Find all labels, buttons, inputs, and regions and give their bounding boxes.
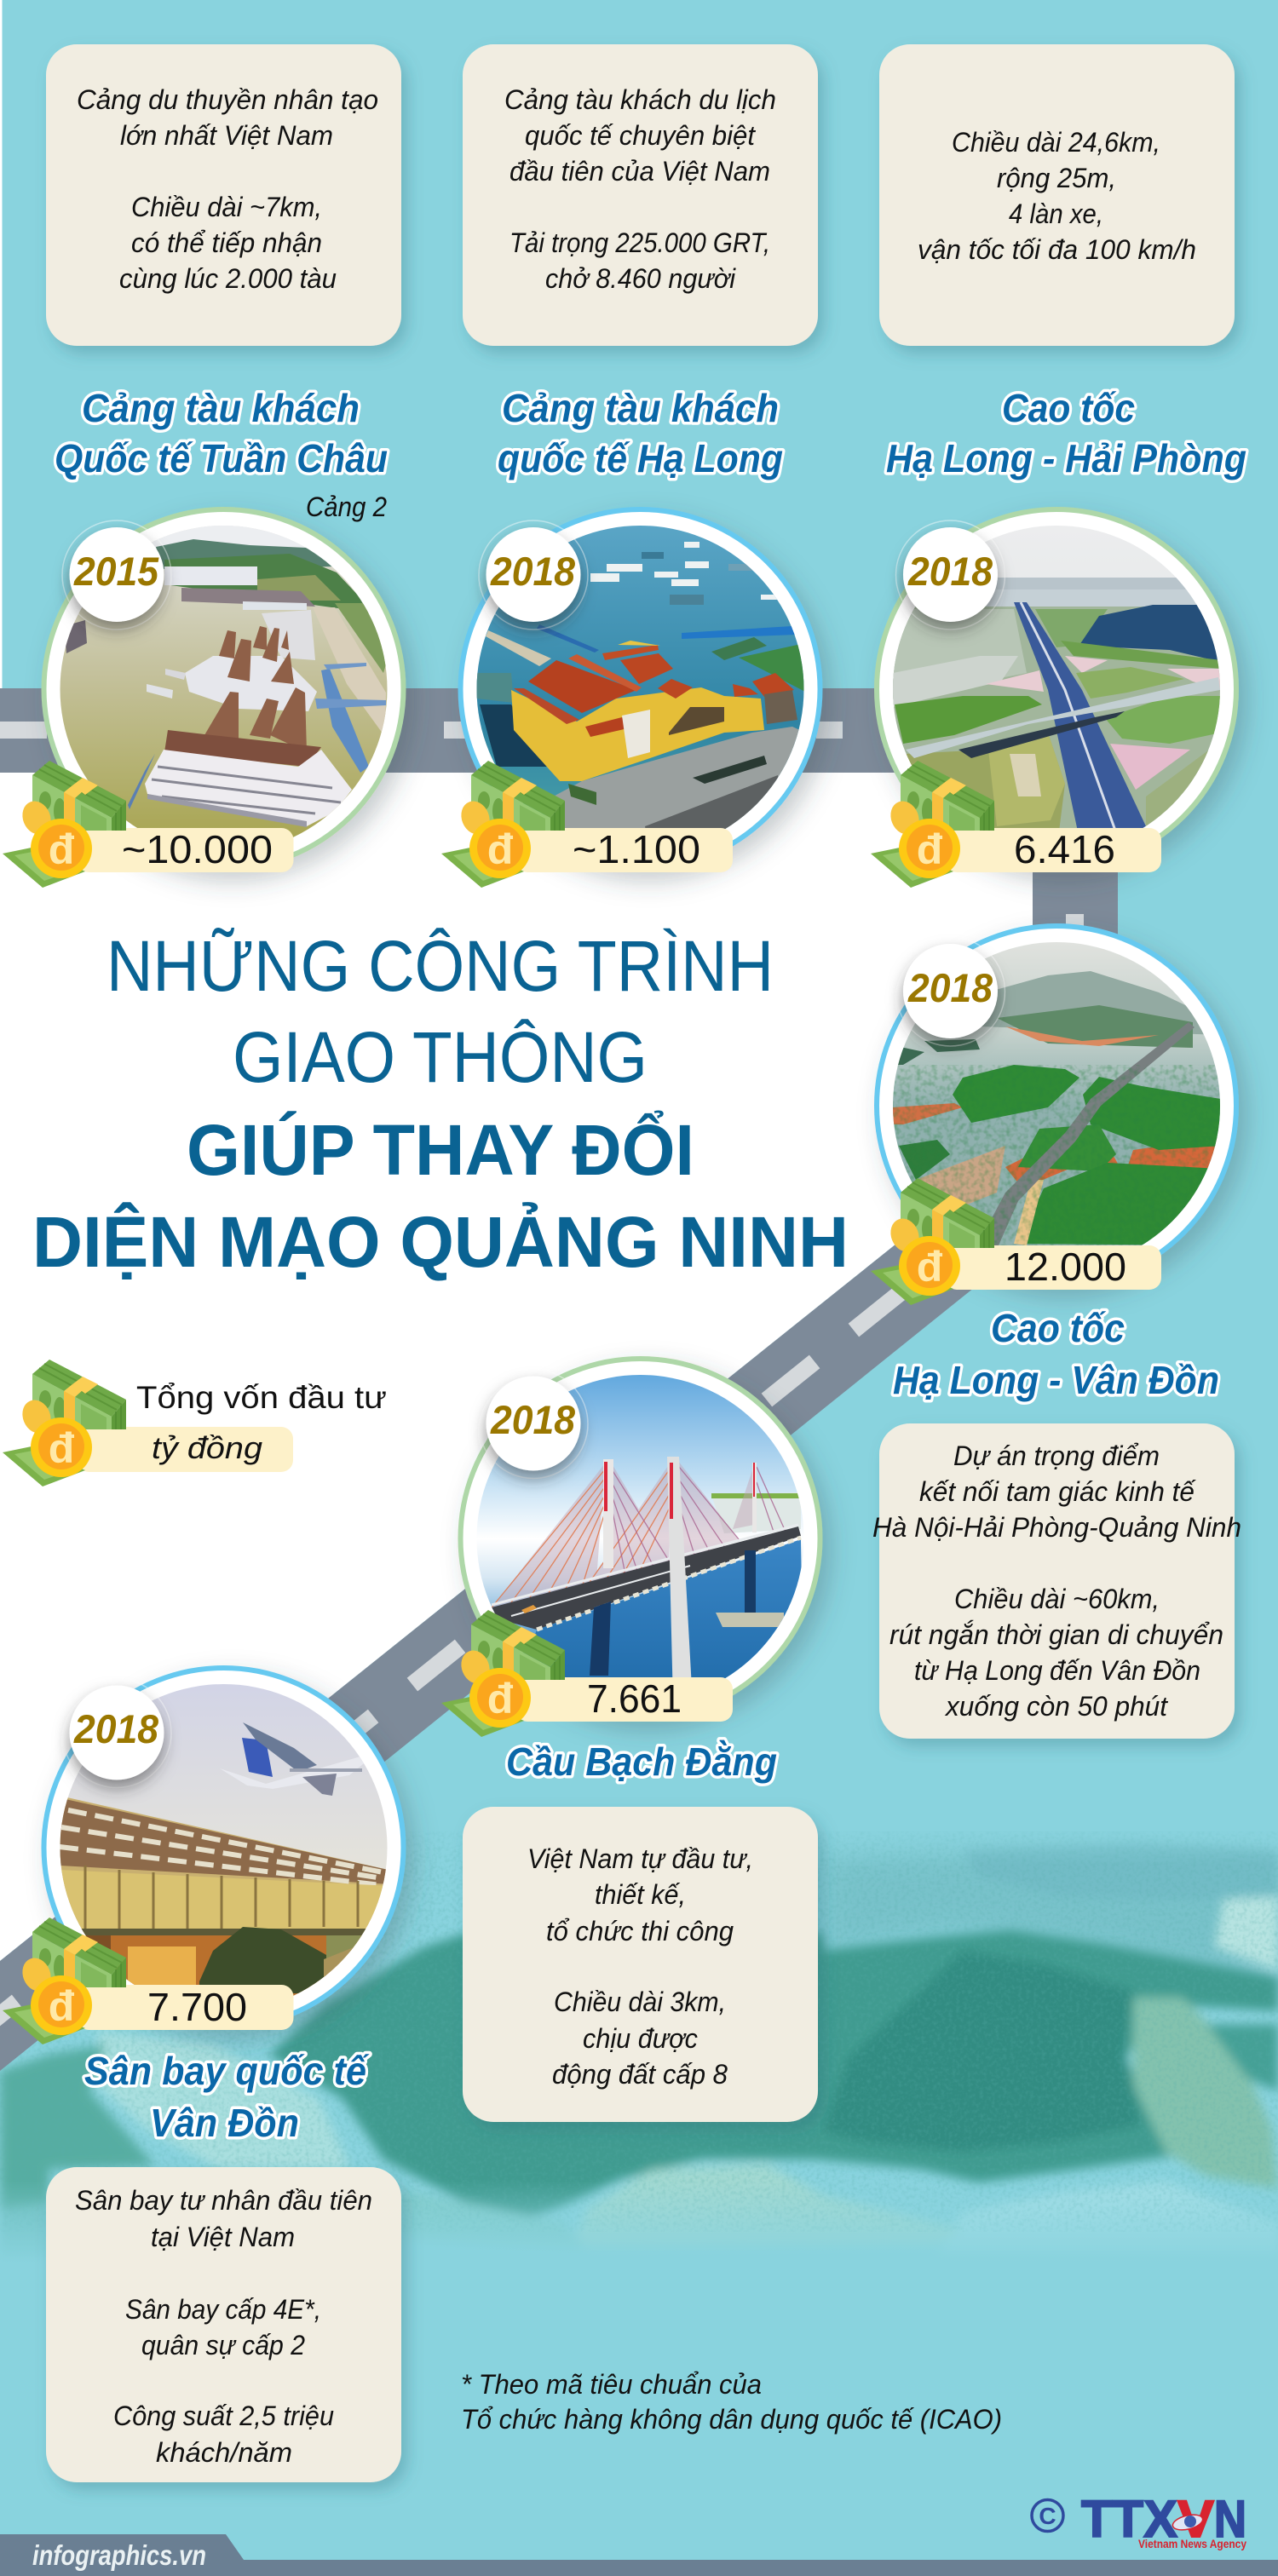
footnote: ICAO standard: [461, 2369, 1002, 2435]
year badge: 2018: [479, 1370, 588, 1479]
panel: Bạch Đằng bridge description: chịu được: [583, 2023, 698, 2054]
year badge: 2018: [479, 520, 588, 630]
title: NHỮNG CÔNG TRÌNH: [106, 926, 774, 1006]
panel: airport description: quân sự cấp 2: [141, 2330, 305, 2360]
investment: ~1.100: ~1.100: [573, 827, 700, 871]
panel: Hạ Long - Hải Phòng description: Chiều dài 24,6km,: [952, 127, 1160, 158]
panel: Tuần Châu description: Chiều dài ~7km,: [131, 192, 322, 222]
panel: airport description: tại Việt Nam: [151, 2222, 295, 2252]
heading: Cảng tàu khách Quốc tế Tuần Châu: Cảng tàu khách: [82, 386, 360, 430]
year badge: 2018: 2018: [907, 965, 993, 1010]
logo: TTXVN Vietnam News Agency: N: [1214, 2490, 1246, 2548]
year badge: 2015: [62, 520, 171, 630]
investment: ~10.000: ~10.000: [122, 827, 273, 871]
heading: Sân bay quốc tế Vân Đồn: [84, 2049, 370, 2145]
panel: Tuần Châu description: Cảng du thuyền nhân tạo: [77, 84, 378, 115]
panel: Vân Đồn expressway description: xuống còn 50 phút: [944, 1691, 1168, 1722]
investment: 7.700: [3, 1918, 293, 2044]
legend: total investment: tỷ đồng: [152, 1430, 262, 1465]
investment: 7.661: [441, 1610, 733, 1737]
panel: Vân Đồn expressway description: kết nối tam giác kinh tế: [919, 1476, 1196, 1507]
investment: 7.700: đ: [49, 1982, 75, 2030]
investment: 7.661: đ: [487, 1675, 514, 1722]
panel: Hạ Long - Hải Phòng description: [879, 44, 1235, 346]
panel: airport description: [46, 2167, 401, 2482]
year badge: 2018: 2018: [490, 549, 576, 594]
panel: Hạ Long port description: chở 8.460 người: [545, 263, 736, 294]
panel: Tuần Châu description: [46, 44, 401, 346]
year badge: 2018: 2018: [907, 549, 993, 594]
heading: Cầu Bạch Đằng: Cầu Bạch Đằng: [506, 1739, 777, 1784]
panel: Bạch Đằng bridge description: thiết kế,: [595, 1879, 686, 1910]
heading: Cao tốc Hạ Long - Vân Đồn: Cao tốc: [991, 1306, 1125, 1350]
note: Cảng 2: Cảng 2: [306, 492, 387, 522]
heading: Cảng tàu khách Quốc tế Tuần Châu: [55, 386, 388, 480]
investment: 6.416: 6.416: [1014, 827, 1115, 871]
heading: Cảng tàu khách quốc tế Hạ Long: Cảng tàu khách: [502, 386, 779, 430]
logo: TTXVN Vietnam News Agency: Vietnam News Agency: [1138, 2538, 1246, 2550]
year badge: 2018: [62, 1678, 171, 1787]
panel: Hạ Long port description: Tải trọng 225.000 GRT,: [509, 227, 770, 258]
panel: Hạ Long - Hải Phòng description: rộng 25m,: [997, 163, 1116, 193]
heading: Sân bay quốc tế Vân Đồn: Vân Đồn: [150, 2101, 299, 2145]
investment: 6.416: [871, 761, 1161, 888]
investment: 7.700: 7.700: [147, 1985, 247, 2029]
panel: Vân Đồn expressway description: rút ngắn thời gian di chuyển: [889, 1619, 1223, 1650]
panel: Hạ Long port description: quốc tế chuyên biệt: [525, 120, 756, 151]
investment: ~10.000: [3, 761, 293, 888]
footer bar: [0, 2534, 1278, 2576]
panel: Vân Đồn expressway description: Hà Nội-Hải Phòng-Quảng Ninh: [872, 1512, 1241, 1543]
project: Tuần Châu port: [3, 44, 404, 888]
panel: airport description: Sân bay tư nhân đầu tiên: [75, 2185, 372, 2216]
panel: Hạ Long port description: đầu tiên của Việt Nam: [509, 156, 770, 187]
logo: TTXVN Vietnam News Agency: C: [1039, 2503, 1056, 2529]
project: Vân Đồn international airport: [3, 1668, 404, 2482]
panel: Tuần Châu description: cùng lúc 2.000 tàu: [119, 263, 337, 294]
heading: Cảng tàu khách quốc tế Hạ Long: quốc tế Hạ Long: [498, 436, 783, 480]
background: faded forest photo at the bottom: [0, 1835, 1278, 2242]
project: Hạ Long - Hải Phòng expressway: [871, 44, 1246, 888]
title: GIÚP THAY ĐỔI: [187, 1110, 694, 1190]
year badge: 2018: [896, 937, 1005, 1046]
panel: airport description: Công suất 2,5 triệu: [113, 2401, 334, 2431]
panel: Bạch Đằng bridge description: Việt Nam tự đầu tư,: [527, 1843, 753, 1874]
title: GIAO THÔNG: [233, 1017, 648, 1097]
investment: ~1.100: đ: [487, 825, 514, 873]
panel: Bạch Đằng bridge description: Chiều dài 3km,: [554, 1987, 726, 2017]
panel: Vân Đồn expressway description: Dự án trọng điểm: [953, 1440, 1160, 1471]
project: Bạch Đằng bridge: [441, 1359, 820, 2122]
year badge: 2018: [896, 520, 1005, 630]
heading: Cảng tàu khách Quốc tế Tuần Châu: Quốc tế Tuần Châu: [55, 436, 388, 480]
legend: total investment: đ: [49, 1424, 75, 1472]
panel: Vân Đồn expressway description: Chiều dài ~60km,: [954, 1584, 1160, 1614]
panel: airport description: khách/năm: [156, 2437, 292, 2468]
heading: Cảng tàu khách quốc tế Hạ Long: [498, 386, 783, 480]
footnote: ICAO standard: * Theo mã tiêu chuẩn của: [461, 2369, 762, 2400]
logo: TTXVN Vietnam News Agency: [1032, 2490, 1246, 2550]
logo: TTXVN Vietnam News Agency: TTX: [1081, 2490, 1177, 2548]
footer bar: infographics.vn: [32, 2539, 206, 2571]
project: Hạ Long port: [441, 44, 820, 888]
panel: Hạ Long - Hải Phòng description: 4 làn xe,: [1009, 198, 1103, 229]
photo circle: airport terminal and plane: [44, 1668, 404, 2027]
heading: Cao tốc Hạ Long - Hải Phòng: [886, 386, 1246, 480]
title: DIỆN MẠO QUẢNG NINH: [32, 1202, 849, 1282]
heading: Cao tốc Hạ Long - Vân Đồn: [893, 1306, 1219, 1402]
heading: Cao tốc Hạ Long - Hải Phòng: Hạ Long - Hải Phòng: [886, 436, 1246, 480]
panel: Bạch Đằng bridge description: tổ chức thi công: [546, 1916, 734, 1946]
panel: Tuần Châu description: lớn nhất Việt Nam: [120, 120, 333, 151]
investment: 12.000: [871, 1178, 1161, 1305]
photo circle: Tuần Châu harbour: [44, 509, 404, 869]
legend: total investment: [3, 1360, 387, 1486]
investment: 6.416: đ: [917, 825, 943, 873]
panel: Hạ Long port description: [463, 44, 818, 346]
photo circle: expressway interchange: [877, 509, 1236, 869]
icon: airplane: [220, 1722, 368, 1796]
panel: Vân Đồn expressway description: từ Hạ Long đến Vân Đồn: [914, 1655, 1200, 1686]
investment: 12.000: 12.000: [1005, 1245, 1126, 1289]
photo circle: Hạ Long port building: [460, 509, 820, 869]
footnote: ICAO standard: Tổ chức hàng không dân dụng quốc tế (ICAO): [461, 2404, 1002, 2435]
heading: Cao tốc Hạ Long - Hải Phòng: Cao tốc: [1002, 386, 1135, 430]
title: [32, 926, 849, 1282]
logo: TTXVN Vietnam News Agency: V: [1177, 2490, 1214, 2548]
investment: ~10.000: đ: [49, 825, 75, 873]
legend: total investment: Tổng vốn đầu tư: [136, 1380, 387, 1415]
heading: Cao tốc Hạ Long - Vân Đồn: Hạ Long - Vân Đồn: [893, 1358, 1219, 1402]
panel: Vân Đồn expressway description: [872, 1423, 1241, 1739]
panel: Bạch Đằng bridge description: động đất cấp 8: [552, 2059, 728, 2090]
panel: Tuần Châu description: có thể tiếp nhận: [131, 227, 322, 258]
project: Hạ Long - Vân Đồn expressway: [871, 926, 1241, 1739]
panel: Bạch Đằng bridge description: [463, 1807, 818, 2122]
investment: ~1.100: [441, 761, 733, 888]
panel: Hạ Long - Hải Phòng description: vận tốc tối đa 100 km/h: [918, 234, 1196, 265]
year badge: 2015: 2015: [73, 549, 159, 594]
heading: Sân bay quốc tế Vân Đồn: Sân bay quốc tế: [84, 2049, 370, 2093]
road: [0, 688, 1118, 2071]
year badge: 2018: 2018: [73, 1706, 159, 1751]
photo circle: Vân Đồn expressway: [877, 926, 1236, 1285]
investment: 12.000: đ: [917, 1243, 943, 1291]
panel: airport description: Sân bay cấp 4E*,: [125, 2294, 321, 2325]
photo circle: cable-stayed bridge: [460, 1359, 820, 1718]
panel: Hạ Long port description: Cảng tàu khách du lịch: [504, 84, 776, 115]
investment: 7.661: 7.661: [587, 1676, 682, 1721]
year badge: 2018: 2018: [490, 1397, 576, 1442]
